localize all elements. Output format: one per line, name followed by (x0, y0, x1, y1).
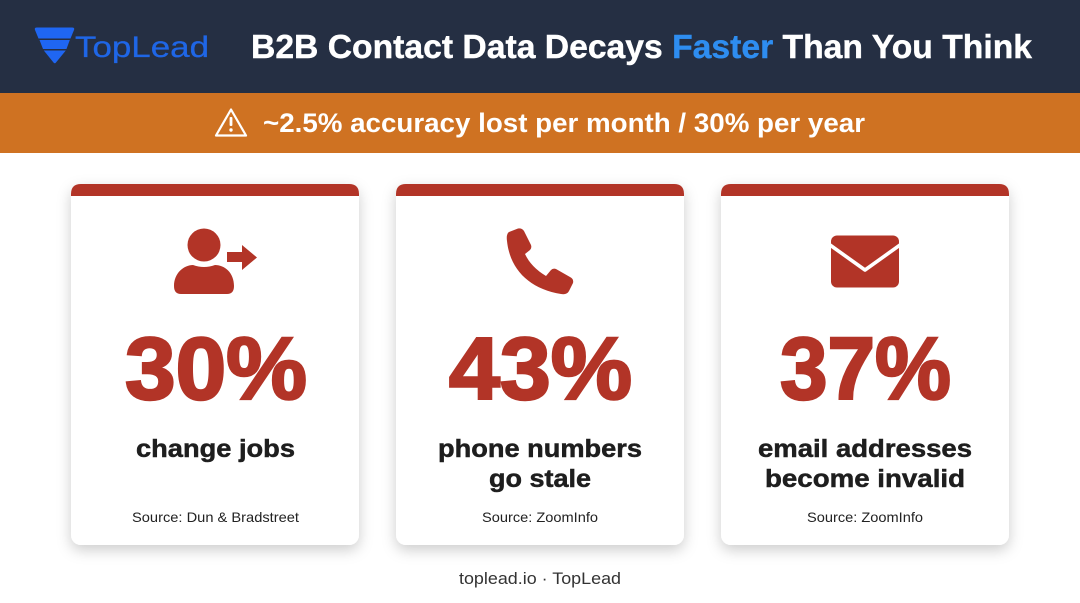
alert text: ~2.5% accuracy lost per month / 30% per year (263, 108, 865, 138)
panel: email addresses (721, 184, 1009, 545)
source: Source: ZoomInfo (807, 509, 923, 525)
label (758, 435, 972, 493)
icon: person leaving (174, 228, 257, 294)
alert band (0, 93, 1080, 153)
footer: toplead.io · TopLead (459, 569, 621, 588)
title: B2B Contact Data Decays Faster Than You Think (251, 28, 1033, 65)
panel: phone numbers (396, 184, 684, 545)
icon: envelope (830, 236, 900, 288)
stat: 37%: 37% (780, 319, 951, 418)
label: phone numbers (438, 435, 642, 463)
card top bar (71, 184, 359, 196)
source: Source: Dun & Bradstreet (132, 509, 299, 525)
panel: change jobs (71, 184, 359, 545)
label (438, 435, 642, 493)
icon: funnel (35, 28, 74, 63)
label: email addresses (758, 435, 972, 463)
header band (0, 0, 1080, 93)
logo wordmark: TopLead (75, 31, 209, 64)
icon: warning triangle (216, 110, 246, 136)
label: go stale (489, 465, 591, 493)
logo: TopLead (35, 28, 209, 64)
source: Source: ZoomInfo (482, 509, 598, 525)
icon: phone (507, 228, 573, 294)
card top bar (721, 184, 1009, 196)
card top bar (396, 184, 684, 196)
label: change jobs (136, 435, 295, 463)
label: become invalid (765, 465, 965, 493)
stat: 43%: 43% (449, 319, 632, 418)
stat: 30%: 30% (125, 319, 307, 418)
